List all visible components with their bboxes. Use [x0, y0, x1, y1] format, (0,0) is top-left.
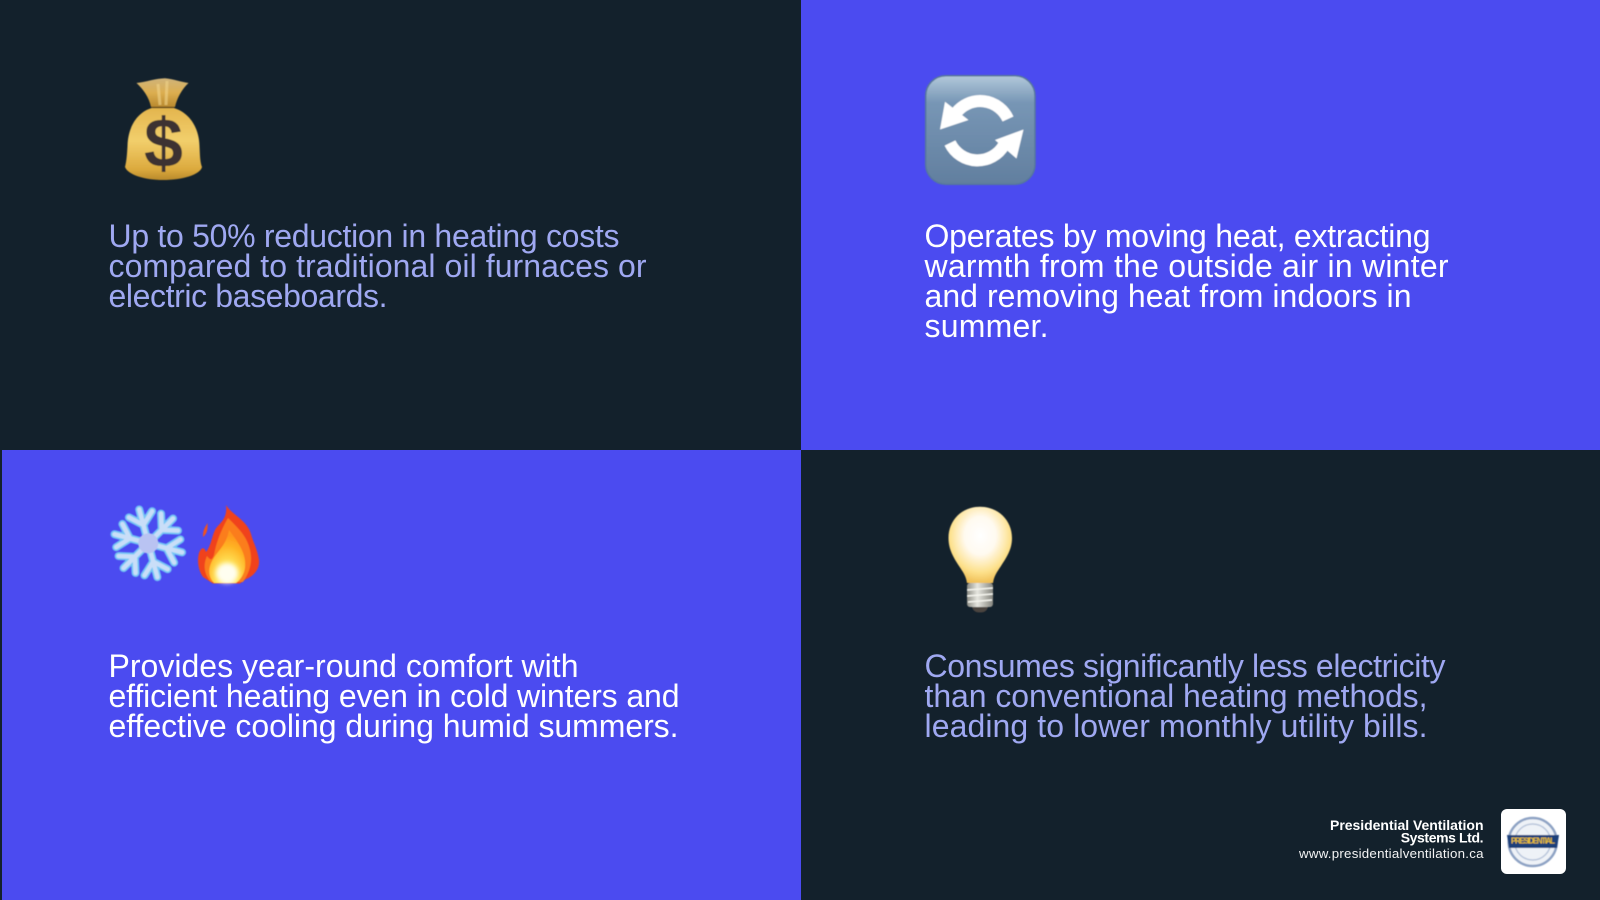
panel: year-round comfort [2, 450, 801, 900]
text: energy savings: Up to 50% reduction in heating costs [108, 218, 620, 254]
left edge strip [0, 450, 2, 900]
text: how it operates: and removing heat from indoors in [924, 278, 1412, 314]
text: energy savings: compared to traditional oil furnaces or [108, 248, 647, 284]
icon: money bag: $ [144, 104, 183, 182]
panel: how it operates [801, 0, 1600, 450]
panel: lower electricity use [801, 450, 1600, 900]
text: year-round comfort: effective cooling during humid summers. [108, 708, 678, 744]
text: how it operates: warmth from the outside air in winter [924, 248, 1449, 284]
text: how it operates: summer. [924, 308, 1048, 344]
text: how it operates: Operates by moving heat, extracting [924, 218, 1430, 254]
icon: flame [198, 505, 259, 584]
icon: refresh arrows [926, 76, 1035, 184]
icon: light bulb [948, 507, 1012, 612]
text: lower electricity use: leading to lower monthly utility bills. [924, 708, 1428, 744]
text: year-round comfort: Provides year-round comfort with [108, 648, 578, 684]
text: lower electricity use: than conventional heating methods, [924, 678, 1428, 714]
panel: energy savings [0, 0, 801, 450]
footer brand [1298, 809, 1566, 874]
icon: snowflake [104, 500, 192, 587]
logo badge: PRESIDENTIAL [1511, 836, 1555, 846]
logo badge [1501, 809, 1566, 874]
text: year-round comfort: efficient heating even in cold winters and [108, 678, 680, 714]
text: lower electricity use: Consumes significantly less electricity [924, 648, 1446, 684]
footer company name: Presidential Ventilation [1330, 817, 1484, 833]
footer website: www.presidentialventilation.ca [1298, 846, 1484, 861]
icon: money bag [125, 78, 202, 182]
text: energy savings: electric baseboards. [108, 278, 388, 314]
footer company name: Systems Ltd. [1401, 829, 1484, 845]
